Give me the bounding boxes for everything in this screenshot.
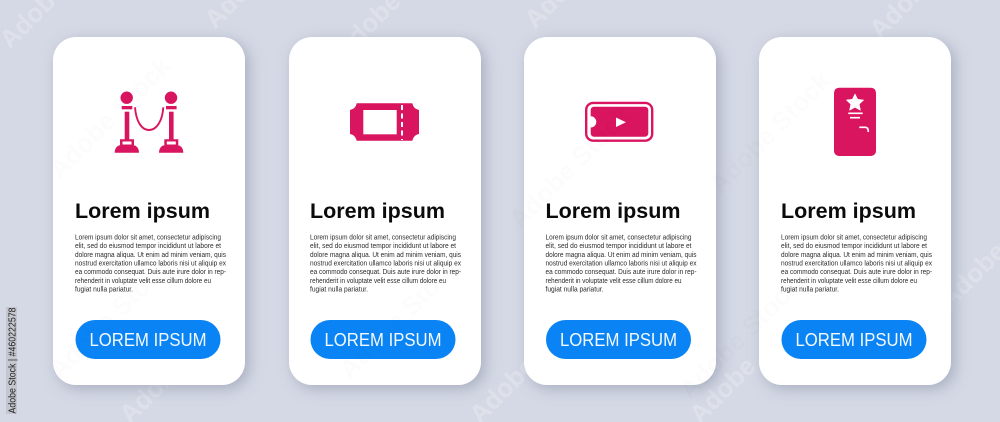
- text block: nostrud exercitation ullamco laboris nisi ut aliquip ex: [75, 260, 226, 268]
- text block: ea commodo consequat. Duis aute irure dolor in rep-: [310, 269, 462, 276]
- button: [310, 320, 456, 359]
- text block: [546, 234, 697, 293]
- text block: fugiat nulla pariatur.: [546, 286, 604, 293]
- text block: [75, 234, 227, 293]
- text block: ea commodo consequat. Duis aute irure dolor in rep-: [781, 269, 933, 276]
- panel: card 1 velvet rope: [53, 37, 245, 385]
- panel: card 3 video ticket: [524, 37, 716, 385]
- heading: Lorem ipsum: [75, 199, 210, 223]
- text block: elit, sed do eiusmod tempor incididunt ut labore et: [310, 243, 456, 250]
- text block: rehenderit in voluptate velit esse cillum dolore eu: [781, 278, 917, 285]
- heading: Lorem ipsum: [310, 199, 445, 223]
- button: [76, 320, 220, 359]
- text block: Lorem ipsum dolor sit amet, consectetur adipiscing: [75, 234, 221, 242]
- panel: card 2 ticket: [289, 37, 481, 385]
- button: LOREM IPSUM: [90, 329, 206, 350]
- text block: rehenderit in voluptate velit esse cillum dolore eu: [310, 278, 446, 285]
- text block: dolore magna aliqua. Ut enim ad minim veniam, quis: [310, 252, 461, 259]
- text block: elit, sed do eiusmod tempor incididunt ut labore et: [781, 243, 927, 250]
- text block: rehenderit in voluptate velit esse cillum dolore eu: [75, 278, 211, 285]
- watermarks: [43, 50, 837, 404]
- side credit: Adobe Stock | #460222578: [6, 307, 18, 414]
- icon: star pass: [834, 88, 876, 156]
- heading: Lorem ipsum: [546, 199, 680, 223]
- text block: elit, sed do eiusmod tempor incididunt ut labore et: [546, 243, 692, 250]
- icon: video ticket: [586, 103, 652, 141]
- panel: card 4 star pass: [759, 37, 951, 385]
- text block: dolore magna aliqua. Ut enim ad minim veniam, quis: [546, 252, 697, 259]
- icon: ticket: [350, 103, 419, 141]
- text block: fugiat nulla pariatur.: [781, 286, 839, 293]
- text block: elit, sed do eiusmod tempor incididunt ut labore et: [75, 243, 221, 250]
- button: [546, 320, 691, 359]
- button: [782, 320, 926, 359]
- text block: dolore magna aliqua. Ut enim ad minim veniam, quis: [75, 252, 226, 259]
- text block: rehenderit in voluptate velit esse cillum dolore eu: [546, 278, 682, 285]
- icon: rope barrier: [115, 92, 183, 153]
- button: LOREM IPSUM: [324, 329, 442, 350]
- button: LOREM IPSUM: [796, 329, 912, 350]
- text block: nostrud exercitation ullamco laboris nisi ut aliquip ex: [310, 260, 461, 268]
- text block: Lorem ipsum dolor sit amet, consectetur adipiscing: [310, 234, 456, 242]
- text block: ea commodo consequat. Duis aute irure dolor in rep-: [75, 269, 227, 276]
- text block: ea commodo consequat. Duis aute irure dolor in rep-: [546, 269, 697, 276]
- text block: dolore magna aliqua. Ut enim ad minim veniam, quis: [781, 252, 932, 259]
- text block: fugiat nulla pariatur.: [310, 286, 368, 293]
- text block: [781, 234, 933, 293]
- button: LOREM IPSUM: [560, 329, 677, 350]
- text block: Lorem ipsum dolor sit amet, consectetur adipiscing: [546, 234, 692, 242]
- heading: Lorem ipsum: [781, 199, 916, 223]
- text block: Lorem ipsum dolor sit amet, consectetur adipiscing: [781, 234, 927, 242]
- text block: fugiat nulla pariatur.: [75, 286, 133, 293]
- text block: nostrud exercitation ullamco laboris nisi ut aliquip ex: [546, 260, 697, 268]
- text block: [310, 234, 462, 293]
- text block: nostrud exercitation ullamco laboris nisi ut aliquip ex: [781, 260, 932, 268]
